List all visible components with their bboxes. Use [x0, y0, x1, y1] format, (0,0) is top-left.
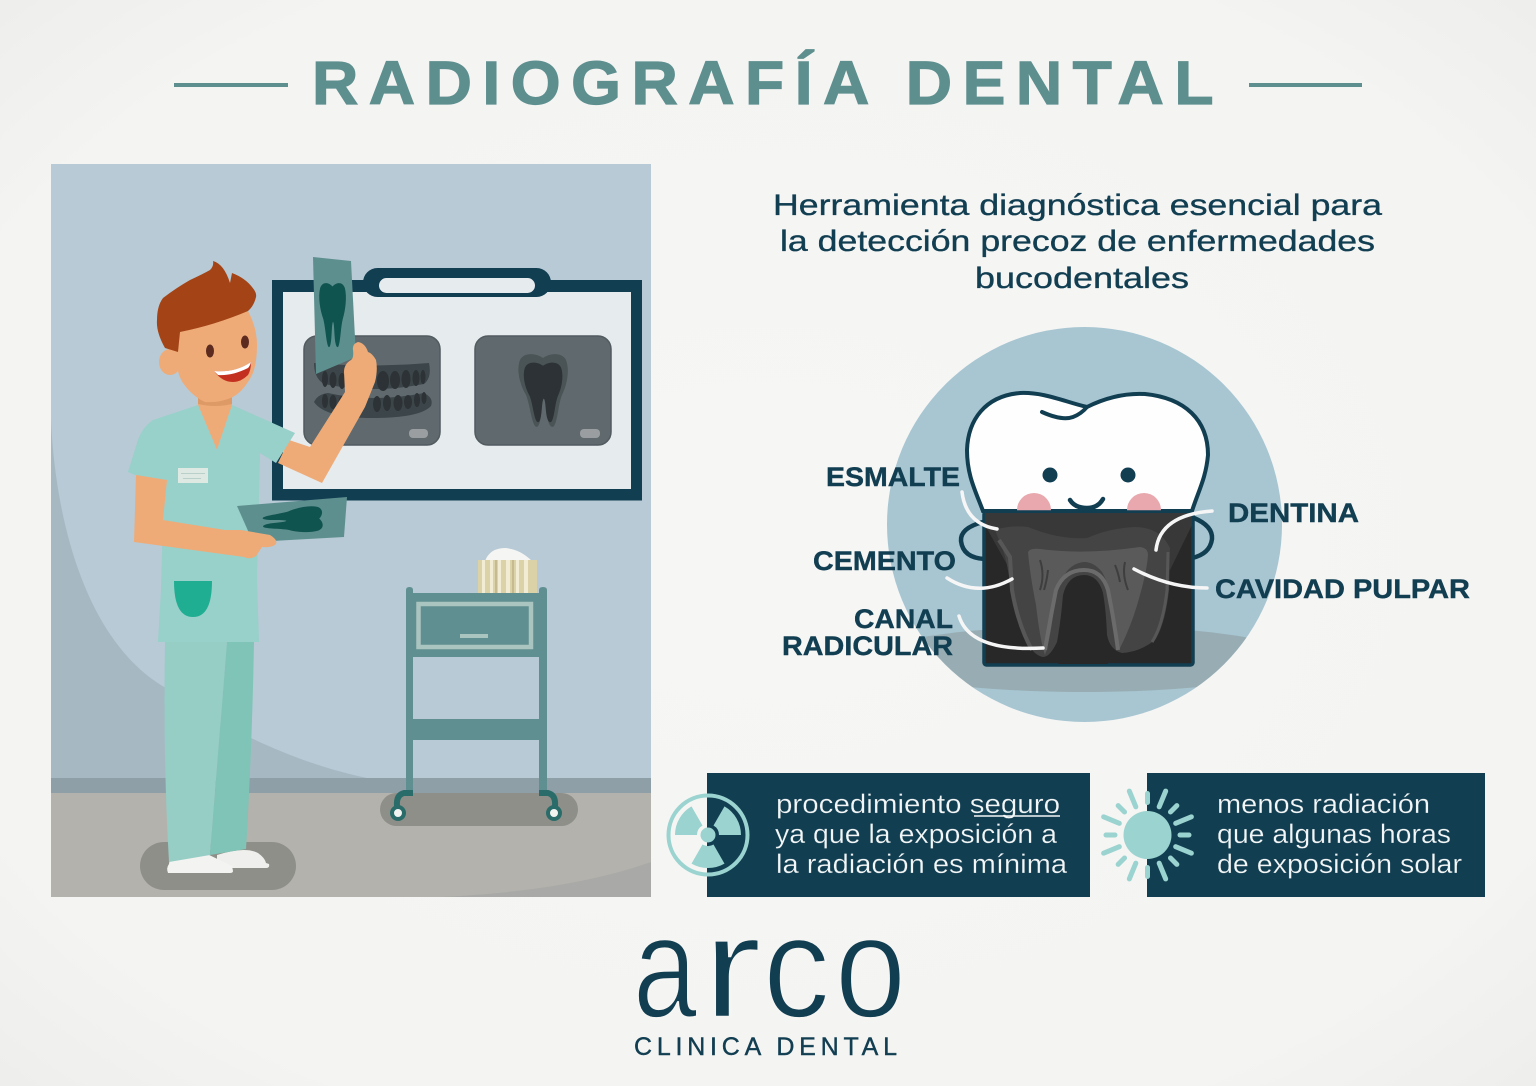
title: RADIOGRAFÍA DENTAL — [312, 49, 1224, 117]
callout: less radiation: que algunas horas — [1217, 819, 1451, 849]
logo: r — [702, 886, 762, 1048]
label: canal radicular: RADICULAR — [782, 631, 953, 661]
cotton cup — [478, 548, 537, 593]
trolley — [406, 587, 547, 790]
raised arm and hand — [278, 342, 377, 483]
icon: sun — [1104, 791, 1191, 879]
intro text — [773, 189, 1382, 295]
tooth cheeks — [1017, 493, 1161, 527]
pulp veins — [1040, 560, 1128, 590]
pocket — [174, 581, 212, 617]
name badge — [178, 468, 208, 483]
label: canal radicular — [782, 604, 953, 661]
circle floor shadow — [924, 630, 1246, 692]
neck — [198, 404, 232, 450]
root canal arch — [1045, 570, 1118, 650]
wall — [51, 164, 651, 779]
label: dentina: DENTINA — [1228, 498, 1359, 528]
x-ray: full mouth — [304, 336, 440, 445]
x-ray: single tooth — [475, 336, 611, 445]
callout: safe procedure: procedimiento seguro — [776, 789, 1060, 819]
tooth arms — [961, 518, 1212, 559]
raised x-ray film — [313, 257, 356, 374]
label: cavidad pulpar: CAVIDAD PULPAR — [1215, 574, 1470, 604]
crown band — [985, 513, 1192, 570]
callout: safe procedure: la radiación es mínima — [776, 849, 1068, 879]
tooth diagram — [782, 327, 1470, 722]
label: esmalte: ESMALTE — [826, 462, 960, 492]
ear — [159, 349, 178, 375]
shoes and shadow under dentist — [140, 842, 296, 890]
baseboard — [51, 778, 651, 793]
smile — [214, 362, 251, 382]
scrubs top — [128, 405, 295, 642]
held x-ray film — [237, 497, 347, 542]
eyes — [206, 336, 249, 358]
logo: CLINICA DENTAL — [634, 1033, 897, 1061]
callout: less radiation — [1147, 773, 1485, 897]
intro text: bucodentales — [975, 262, 1189, 295]
intro text: la detección precoz de enfermedades — [780, 225, 1375, 258]
trolley wheels and shadow — [380, 793, 578, 826]
tooth eyes — [1042, 468, 1136, 482]
hair — [157, 261, 256, 352]
lightbox frame — [272, 268, 642, 500]
dentine — [995, 526, 1170, 657]
face — [176, 311, 257, 402]
neck shade — [198, 398, 232, 406]
cartoon tooth — [967, 393, 1208, 511]
floor — [51, 793, 651, 897]
logo — [633, 886, 906, 1061]
logo: a — [633, 886, 697, 1048]
x-ray card — [984, 512, 1193, 665]
label: cemento: CEMENTO — [813, 546, 956, 576]
label: canal radicular: CANAL — [854, 604, 953, 634]
tooth smile — [1070, 499, 1103, 508]
x-ray tooth — [985, 513, 1192, 665]
pulp chamber — [1028, 547, 1148, 655]
callout: less radiation: de exposición solar — [1217, 849, 1462, 879]
cementum edge — [999, 540, 1032, 650]
icon: radiation — [668, 796, 748, 874]
tooth crown curl — [1042, 407, 1087, 418]
logo: c — [763, 886, 830, 1048]
callout: safe procedure — [707, 773, 1090, 897]
logo: o — [835, 886, 906, 1048]
callout: safe procedure: ya que la exposición a — [775, 819, 1058, 849]
panel: dentist scene — [51, 164, 651, 897]
lower arm and hand — [134, 475, 276, 558]
dentist — [128, 257, 377, 642]
leader lines — [947, 492, 1212, 648]
callout: less radiation: menos radiación — [1217, 789, 1430, 819]
floor corner shade — [440, 862, 651, 897]
intro text: Herramienta diagnóstica esencial para — [773, 189, 1382, 222]
inner gap between roots — [1058, 663, 1108, 664]
wall shadow curve — [51, 420, 372, 779]
trousers — [164, 642, 254, 862]
blue circle — [887, 327, 1282, 722]
